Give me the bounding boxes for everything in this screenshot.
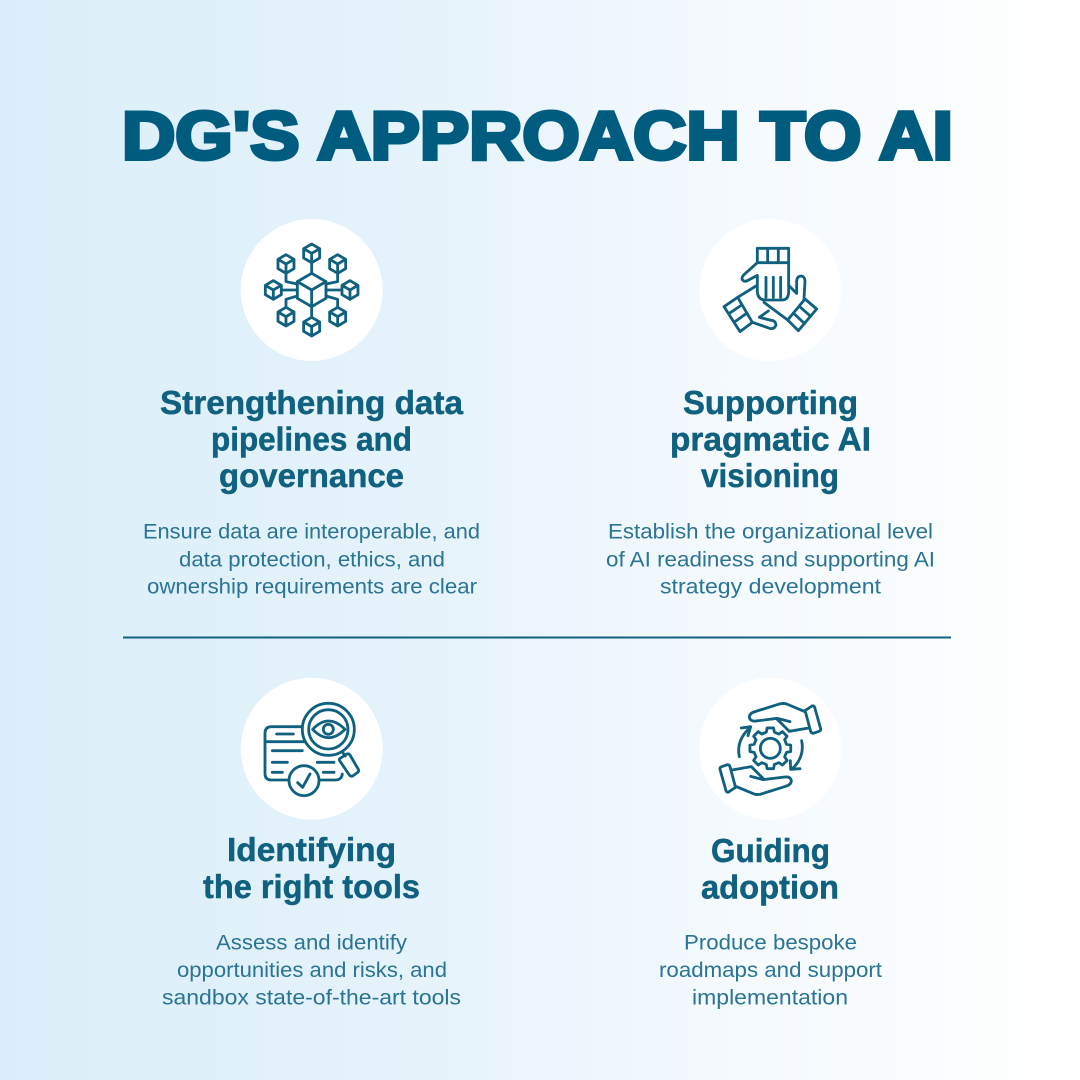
icon circle: adoption xyxy=(699,678,841,820)
icon: hands around gear xyxy=(720,703,821,795)
text: guiding adoption: implementation xyxy=(692,986,848,1010)
text: right tools xyxy=(162,932,461,1010)
text: AI visioning: Establish the organizational level xyxy=(608,520,933,544)
divider line xyxy=(123,636,951,638)
text: guiding adoption: roadmaps and support xyxy=(659,959,882,982)
panel: guiding adoption xyxy=(659,678,882,1010)
icon: magnifier over checked document xyxy=(265,703,359,796)
text: AI visioning: of AI readiness and supporting AI xyxy=(606,548,935,572)
text: AI visioning: strategy development xyxy=(660,576,881,598)
text: data pipelines: Ensure data are interoperable, and xyxy=(143,520,480,544)
icon circle: data network xyxy=(241,219,383,361)
icon: three joined hands xyxy=(724,248,817,332)
heading: right tools: the right tools xyxy=(203,868,420,905)
text: right tools: sandbox state-of-the-art tools xyxy=(162,986,461,1010)
text: right tools: Assess and identify xyxy=(216,932,408,954)
heading: AI visioning xyxy=(670,384,871,494)
text: guiding adoption: Produce bespoke xyxy=(684,932,857,954)
heading: right tools: Identifying xyxy=(227,831,396,868)
text: data pipelines xyxy=(143,520,480,598)
icon circle: tools xyxy=(241,678,383,820)
heading: guiding adoption: adoption xyxy=(701,868,839,906)
heading: data pipelines xyxy=(160,384,464,494)
title: DG'S APPROACH TO AI xyxy=(122,98,953,174)
heading: guiding adoption: Guiding xyxy=(711,832,830,869)
heading: data pipelines: Strengthening data xyxy=(160,384,464,421)
heading: data pipelines: pipelines and xyxy=(211,420,412,458)
heading: data pipelines: governance xyxy=(219,457,404,494)
icon: connected cubes xyxy=(265,244,358,336)
heading: guiding adoption xyxy=(701,832,839,906)
text: guiding adoption xyxy=(659,932,882,1010)
heading: AI visioning: visioning xyxy=(701,457,839,494)
text: AI visioning xyxy=(606,520,935,598)
heading: AI visioning: Supporting xyxy=(683,384,858,421)
text: data pipelines: ownership requirements are clear xyxy=(147,576,477,598)
panel: right tools xyxy=(162,678,461,1010)
heading: right tools xyxy=(203,831,420,905)
heading: AI visioning: pragmatic AI xyxy=(670,420,871,458)
panel: AI visioning xyxy=(606,219,935,598)
text: right tools: opportunities and risks, and xyxy=(177,959,447,982)
text: data pipelines: data protection, ethics, and xyxy=(179,548,445,572)
panel: data pipelines xyxy=(143,219,480,598)
icon circle: hands xyxy=(699,219,841,361)
